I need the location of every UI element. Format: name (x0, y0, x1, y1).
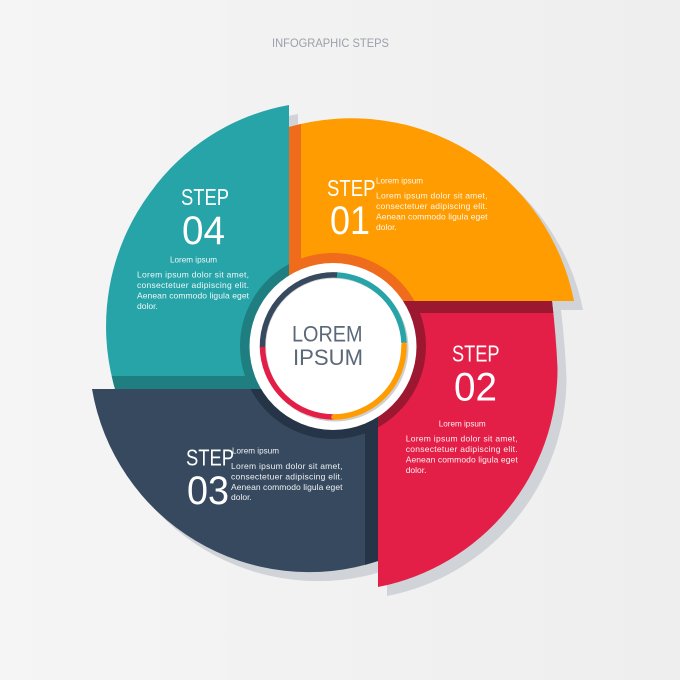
teal segment shape (106, 105, 289, 389)
step 01 text (376, 176, 488, 232)
step 03 text: consectetuer adipiscing elit. (231, 472, 342, 482)
step 04 text: Lorem ipsum dolor sit amet, (137, 270, 249, 280)
step 01 text: Aenean commodo ligula eget (376, 212, 488, 222)
step 03 heading: STEP (186, 445, 234, 471)
step 02 text: consectetuer adipiscing elit. (406, 444, 518, 454)
step 01 text: Lorem ipsum dolor sit amet, (376, 191, 488, 201)
step 01 heading: STEP (327, 175, 376, 201)
step 02 text: Lorem ipsum (439, 419, 486, 429)
step 02 text: Aenean commodo ligula eget (406, 454, 518, 464)
step 03 text: dolor. (231, 492, 252, 502)
step 03 text (231, 446, 343, 502)
title: INFOGRAPHIC STEPS (272, 36, 389, 50)
drop shadows of the four segments (101, 114, 583, 596)
panel: step 01 orange segment (289, 118, 574, 301)
step 03 heading: 03 (187, 469, 229, 513)
panel: step 02 red segment (378, 301, 558, 587)
step 02 text: Lorem ipsum dolor sit amet, (406, 434, 518, 444)
step 01 text: Lorem ipsum (376, 176, 423, 186)
step 04 text: Lorem ipsum (170, 254, 217, 264)
center circle (250, 263, 416, 430)
center label: IPSUM (293, 345, 363, 370)
step 04 text: dolor. (137, 301, 158, 311)
orange segment shape (289, 118, 574, 301)
step 01 heading: 01 (330, 199, 370, 243)
step 03 text: Lorem ipsum (232, 446, 279, 456)
step 04 heading: 04 (182, 209, 225, 253)
step 03 text: Lorem ipsum dolor sit amet, (231, 461, 342, 471)
step 04 heading (181, 184, 229, 253)
center label: LOREM (292, 322, 362, 347)
panel: step 03 navy segment (92, 389, 378, 572)
step 03 heading (186, 445, 234, 513)
progress ring shadow (264, 277, 406, 419)
progress ring (262, 275, 404, 417)
step 02 heading: 02 (454, 366, 497, 410)
step 03 text: Aenean commodo ligula eget (231, 482, 343, 492)
navy segment shape (92, 389, 378, 572)
step 04 text (137, 254, 250, 311)
center label (292, 322, 363, 370)
step 02 text: dolor. (406, 465, 426, 475)
inner white face (266, 278, 401, 414)
step 02 heading (452, 341, 500, 410)
step 01 heading (327, 175, 376, 243)
step 02 heading: STEP (452, 341, 500, 367)
step 02 text (406, 419, 518, 475)
step 01 text: dolor. (376, 222, 397, 232)
panel: step 04 teal segment (106, 105, 289, 389)
step 01 text: consectetuer adipiscing elit. (376, 201, 488, 211)
step 04 text: Aenean commodo ligula eget (137, 290, 250, 300)
white disc (250, 263, 416, 430)
step 04 heading: STEP (181, 184, 229, 210)
step 04 text: consectetuer adipiscing elit. (137, 280, 249, 290)
red segment shape (378, 301, 558, 587)
